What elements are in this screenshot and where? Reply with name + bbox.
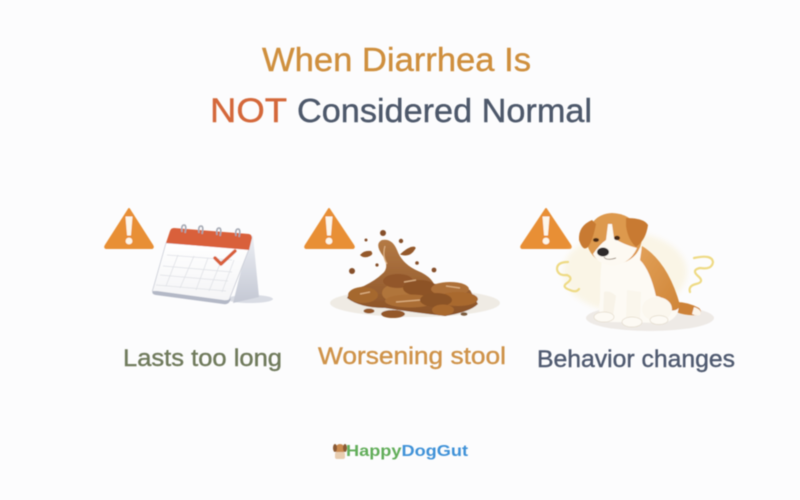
tail	[676, 302, 701, 315]
icon: warning triangle	[521, 209, 571, 248]
icon: calendar	[152, 225, 273, 304]
ears	[579, 220, 596, 248]
label: Lasts too long	[123, 345, 282, 372]
icon: stool pile	[330, 230, 500, 318]
eyes	[593, 238, 599, 242]
legs and paws	[603, 292, 616, 318]
icon: warning triangle	[305, 209, 354, 248]
label: Behavior changes	[537, 346, 735, 373]
logo text: Happy DogGut	[346, 443, 469, 460]
body	[599, 247, 679, 323]
panel: worsening stool	[305, 209, 506, 370]
ground shadow	[586, 305, 714, 331]
logo	[333, 443, 469, 460]
wavy lines	[557, 257, 713, 292]
title line 2: Considered Normal	[297, 92, 592, 129]
title line 2 emphasis: NOT	[210, 92, 287, 130]
icon: warning triangle	[105, 209, 153, 248]
panel: lasts too long	[105, 209, 282, 372]
title	[210, 41, 592, 130]
icon: logo puppy	[333, 444, 347, 459]
nose	[597, 248, 609, 256]
icon: puppy	[557, 213, 714, 331]
panel: behavior changes	[521, 209, 735, 373]
glow behind puppy	[563, 232, 687, 312]
head	[586, 213, 642, 265]
label: Worsening stool	[318, 343, 506, 370]
title line 1: When Diarrhea Is	[262, 41, 531, 78]
